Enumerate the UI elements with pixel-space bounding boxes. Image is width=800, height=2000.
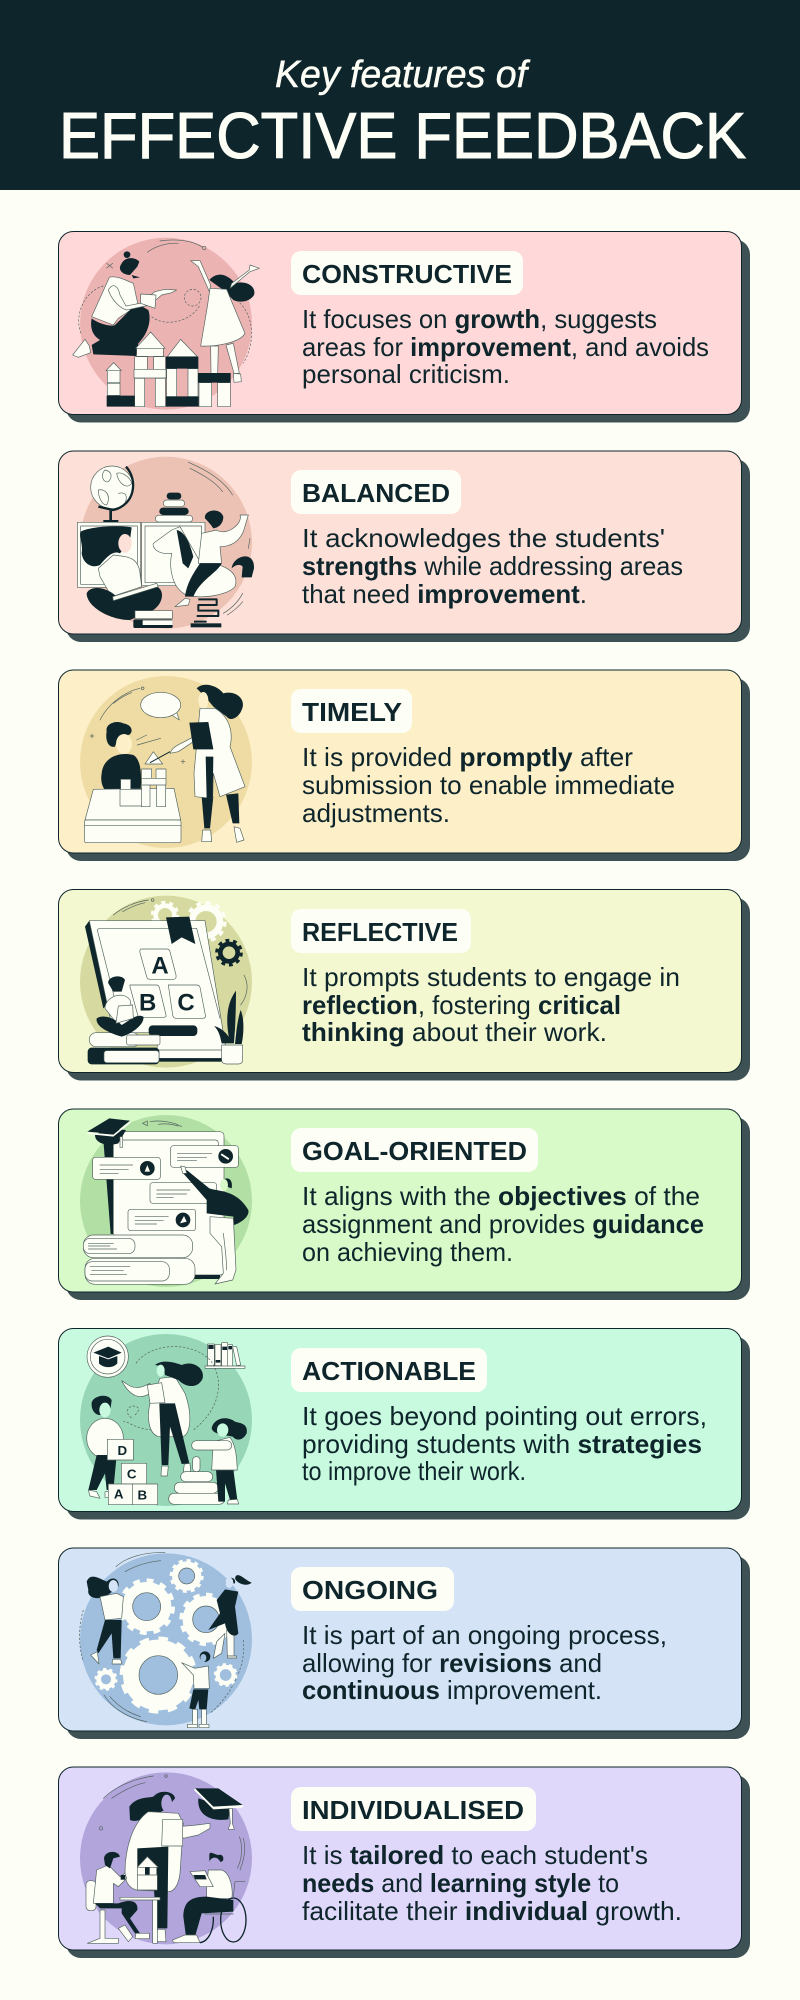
body text: It is tailored to each student's — [302, 1840, 648, 1870]
body text: assignment and provides guidance — [302, 1209, 704, 1239]
body text: submission to enable immediate — [302, 770, 675, 800]
panel: ongoing — [58, 1548, 750, 1739]
illustration: teacher pointing at child's blocks — [80, 676, 252, 848]
body text — [302, 1620, 667, 1705]
heading pill: GOAL-ORIENTED — [302, 1136, 527, 1166]
body text: It aligns with the objectives of the — [302, 1181, 700, 1211]
body text: allowing for revisions and — [302, 1648, 602, 1678]
illustration: teacher with children and letter blocks: C — [127, 1467, 137, 1482]
body text: It focuses on growth, suggests — [302, 304, 657, 334]
panel: timely — [58, 670, 750, 861]
heading pill — [291, 251, 523, 295]
panel: individualised — [58, 1767, 750, 1958]
body text — [302, 1401, 707, 1486]
body text: needs and learning style to — [302, 1868, 619, 1898]
panel: balanced — [58, 451, 750, 642]
body text: strengths while addressing areas — [302, 551, 683, 581]
illustration: student pointing at goal cards — [80, 1115, 252, 1287]
heading pill: BALANCED — [302, 478, 450, 508]
illustration: teacher with children and letter blocks: D — [118, 1443, 128, 1458]
heading pill — [291, 1567, 454, 1611]
header banner — [0, 0, 800, 190]
illustration: teacher with students and graduation cap — [80, 1772, 252, 1944]
heading pill — [291, 1348, 487, 1392]
body text: to improve their work. — [302, 1456, 526, 1486]
heading pill — [291, 1128, 538, 1172]
illustration: child on books with ABC book — [80, 896, 252, 1068]
body text: that need improvement. — [302, 579, 587, 609]
body text: providing students with strategies — [302, 1429, 702, 1459]
body text: It is provided promptly after — [302, 742, 633, 772]
body text — [302, 304, 709, 389]
body text: adjustments. — [302, 798, 450, 828]
body text — [302, 1181, 704, 1267]
body text: facilitate their individual growth. — [302, 1896, 682, 1926]
panel: goal-oriented — [58, 1109, 750, 1300]
illustration: child on books with ABC book: C — [177, 990, 195, 1017]
heading pill — [291, 689, 412, 733]
body text — [302, 1840, 682, 1926]
panel: reflective — [58, 890, 750, 1080]
illustration: child on books with ABC book: B — [139, 990, 156, 1017]
heading pill: REFLECTIVE — [302, 917, 458, 947]
heading pill: CONSTRUCTIVE — [302, 259, 512, 289]
body text: It goes beyond pointing out errors, — [302, 1401, 707, 1431]
illustration: child on books with ABC book: A — [151, 953, 169, 980]
heading pill: TIMELY — [302, 697, 402, 727]
body text: It prompts students to engage in — [302, 962, 680, 992]
title: EFFECTIVE FEEDBACK — [59, 99, 746, 172]
illustration: teacher with children and letter blocks — [80, 1334, 252, 1506]
body text: personal criticism. — [302, 359, 510, 389]
body text: on achieving them. — [302, 1237, 513, 1267]
illustration: teacher with children and letter blocks: B — [138, 1487, 148, 1502]
subtitle: Key features of — [275, 54, 530, 96]
illustration: adult and child building blocks — [73, 238, 259, 410]
body text — [302, 742, 675, 828]
body text: thinking about their work. — [302, 1017, 607, 1047]
heading pill: ACTIONABLE — [302, 1356, 476, 1386]
body text — [302, 962, 680, 1047]
panel: constructive — [58, 232, 750, 422]
body text: continuous improvement. — [302, 1675, 602, 1705]
heading pill: INDIVIDUALISED — [302, 1795, 524, 1825]
heading pill — [291, 470, 461, 514]
body text: areas for improvement, and avoids — [302, 332, 709, 362]
heading pill — [291, 1787, 536, 1831]
illustration: people turning gears — [80, 1553, 252, 1728]
heading pill — [291, 909, 471, 953]
panel: actionable — [58, 1328, 750, 1520]
body text: It acknowledges the students' — [302, 523, 665, 553]
body text: reflection, fostering critical — [302, 990, 621, 1020]
illustration: reading woman and child on rocking horse — [77, 457, 254, 629]
body text — [302, 523, 683, 609]
body text: It is part of an ongoing process, — [302, 1620, 667, 1650]
illustration: teacher with children and letter blocks: A — [114, 1487, 124, 1502]
heading pill: ONGOING — [302, 1575, 438, 1605]
